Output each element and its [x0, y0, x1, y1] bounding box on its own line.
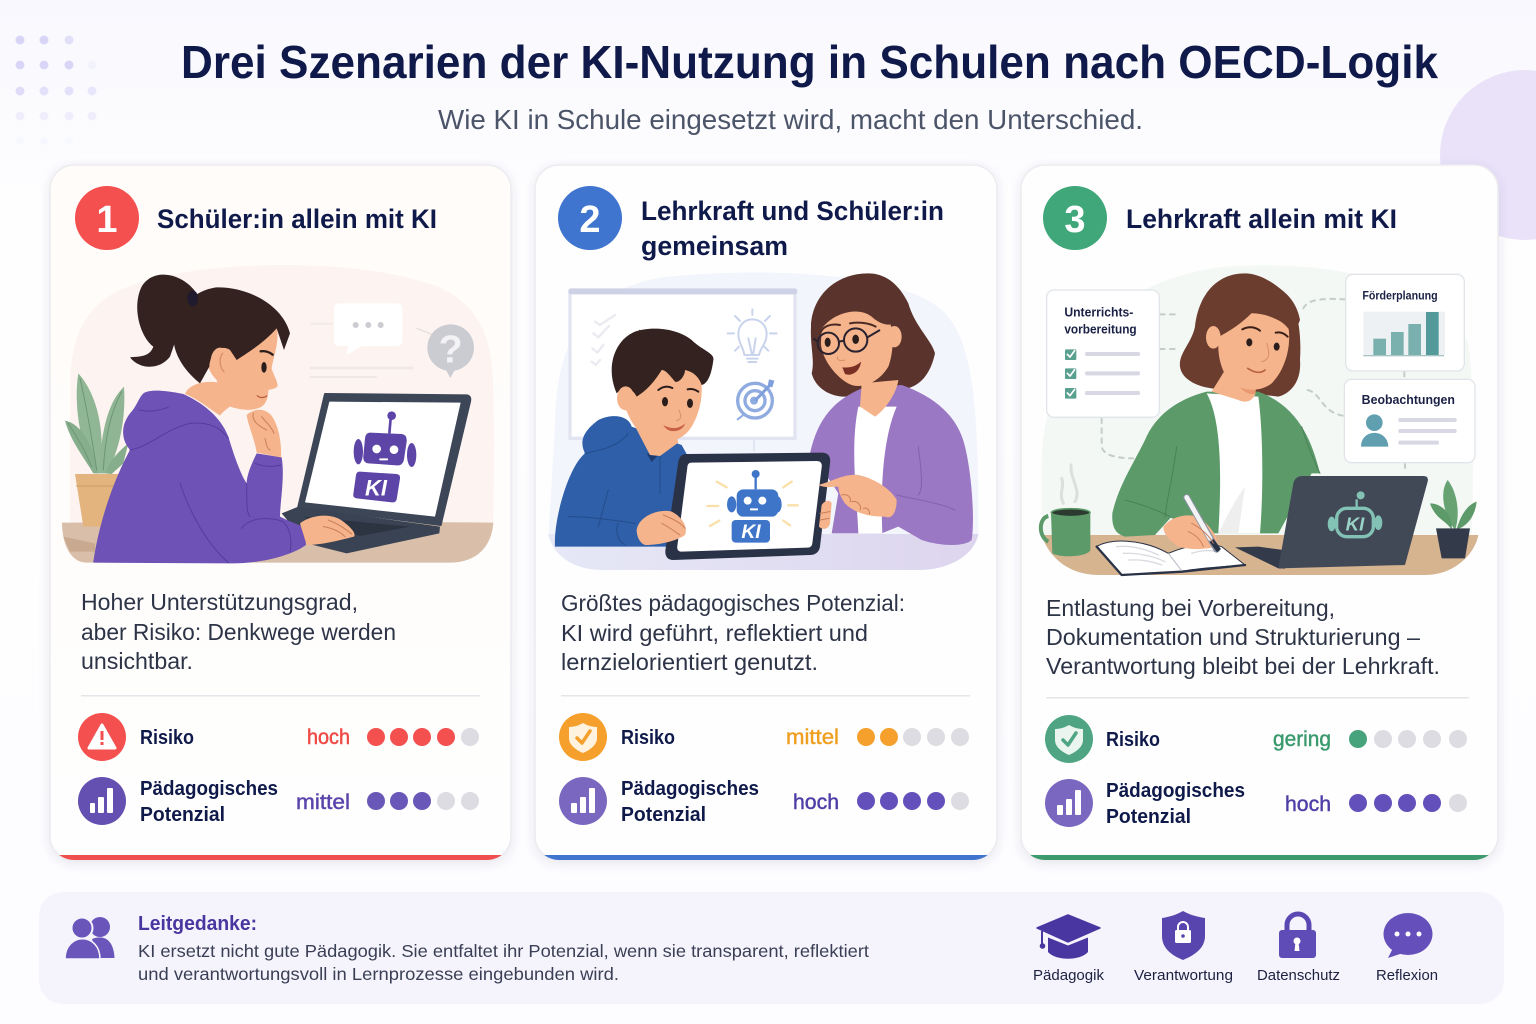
rating: Pädagogisches Potenzial mittel: Potenzial — [140, 803, 225, 826]
panel: Lehrkraft und Schüler:in gemeinsam — [535, 165, 997, 861]
Leitgedanke text — [138, 941, 869, 984]
illustration: student alone with laptop — [62, 265, 494, 563]
rating: Pädagogisches Potenzial hoch: Potenzial — [1106, 805, 1191, 828]
heading 2 — [641, 196, 944, 261]
illustration: student alone with laptop: KI — [365, 476, 388, 501]
description 1: Hoher Unterstützungsgrad, — [81, 589, 358, 615]
heading 3: Lehrkraft allein mit KI — [1126, 204, 1397, 234]
heading 1: Schüler:in allein mit KI — [157, 204, 437, 234]
rating: Risiko gering: Risiko — [1106, 728, 1160, 751]
description 2: lernzielorientiert genutzt. — [561, 649, 818, 675]
rating: Risiko hoch: hoch — [307, 726, 350, 749]
panel: Lehrkraft allein mit KI — [1021, 165, 1498, 861]
illustration: teacher working alone with AI: Beobachtungen — [1362, 393, 1455, 407]
description 1: aber Risiko: Denkwege werden — [81, 619, 396, 645]
number badge 3 — [1043, 186, 1107, 250]
number badge 3: 3 — [1064, 199, 1086, 241]
description 3 — [1046, 595, 1440, 679]
illustration: teacher working alone with AI: vorbereitung — [1064, 321, 1137, 336]
rating: Risiko mittel: mittel — [786, 726, 839, 749]
rating: Pädagogisches Potenzial hoch — [1045, 779, 1467, 828]
description 2: Größtes pädagogisches Potenzial: — [561, 590, 905, 616]
rating: Risiko hoch — [78, 713, 479, 761]
illustration: teacher working alone with AI: KI — [1346, 514, 1365, 535]
rating: Risiko gering: gering — [1273, 728, 1331, 751]
illustration: teacher working alone with AI: Unterrichts- — [1064, 305, 1133, 320]
decorative dot grid — [16, 36, 96, 145]
illustration: teacher working alone with AI — [1041, 265, 1478, 575]
rating: Pädagogisches Potenzial hoch: Pädagogisches — [621, 777, 759, 800]
icon: Datenschutz padlock — [1257, 914, 1340, 984]
Leitgedanke heading: Leitgedanke: — [138, 913, 257, 935]
icon: Pädagogik graduation cap — [1033, 915, 1104, 984]
icon: Reflexion speech bubble — [1376, 913, 1438, 984]
Leitgedanke text: KI ersetzt nicht gute Pädagogik. Sie entfaltet ihr Potenzial, wenn sie transparent, reflektiert — [138, 941, 869, 961]
rating: Pädagogisches Potenzial hoch: hoch — [1285, 793, 1331, 816]
icon: Reflexion speech bubble: Reflexion — [1376, 967, 1438, 984]
description 2: KI wird geführt, reflektiert und — [561, 620, 868, 646]
rating: Pädagogisches Potenzial hoch: hoch — [793, 791, 839, 814]
icon: Datenschutz padlock: Datenschutz — [1257, 967, 1340, 984]
heading 2: Lehrkraft und Schüler:in — [641, 196, 944, 226]
illustration: student alone with laptop: ? — [439, 328, 463, 372]
illustration: teacher and student with tablet: KI — [741, 522, 761, 543]
description 3: Verantwortung bleibt bei der Lehrkraft. — [1046, 653, 1440, 679]
panel: Leitgedanke banner — [39, 892, 1504, 1004]
number badge 1 — [75, 186, 139, 250]
subtitle: Wie KI in Schule eingesetzt wird, macht den Unterschied. — [438, 104, 1143, 135]
rating: Risiko hoch: Risiko — [140, 726, 194, 749]
illustration: teacher working alone with AI: Förderplanung — [1362, 289, 1438, 302]
description 3: Dokumentation und Strukturierung – — [1046, 624, 1420, 650]
number badge 2 — [558, 186, 622, 250]
rating: Pädagogisches Potenzial mittel — [78, 777, 479, 826]
description 3: Entlastung bei Vorbereitung, — [1046, 595, 1335, 621]
number badge 1: 1 — [96, 199, 118, 241]
rating: Pädagogisches Potenzial hoch: Potenzial — [621, 803, 706, 826]
decorative lavender circle — [1440, 70, 1536, 240]
description 1: unsichtbar. — [81, 648, 193, 674]
icon: Verantwortung shield: Verantwortung — [1134, 967, 1233, 984]
rating: Pädagogisches Potenzial hoch — [559, 777, 969, 826]
icon: Pädagogik graduation cap: Pädagogik — [1033, 967, 1104, 984]
Leitgedanke text: und verantwortungsvoll in Lernprozesse eingebunden wird. — [138, 964, 619, 984]
rating: Pädagogisches Potenzial hoch: Pädagogisches — [1106, 779, 1245, 802]
rating: Risiko gering — [1045, 715, 1467, 763]
number badge 2: 2 — [579, 199, 601, 241]
icon: people — [65, 917, 114, 959]
rating: Pädagogisches Potenzial mittel: Pädagogisches — [140, 777, 278, 800]
rating: Risiko mittel — [559, 713, 969, 761]
description 1 — [81, 589, 396, 674]
description 2 — [561, 590, 905, 675]
icon: Verantwortung shield — [1134, 911, 1233, 984]
rating: Risiko mittel: Risiko — [621, 726, 675, 749]
title: Drei Szenarien der KI-Nutzung in Schulen nach OECD-Logik — [181, 36, 1438, 88]
illustration: teacher and student with tablet — [548, 272, 978, 570]
heading 2: gemeinsam — [641, 231, 788, 261]
panel: Schüler:in allein mit KI — [50, 165, 511, 861]
rating: Pädagogisches Potenzial mittel: mittel — [296, 791, 350, 814]
